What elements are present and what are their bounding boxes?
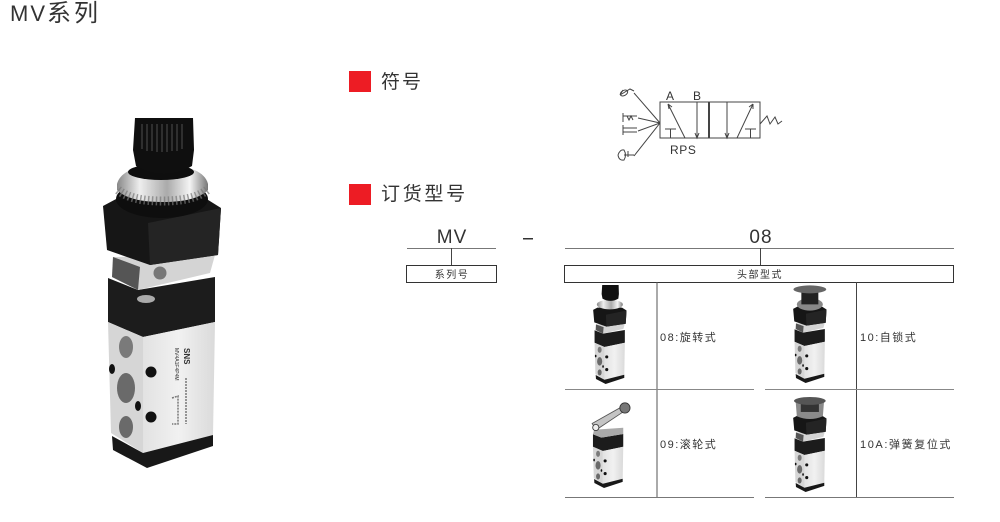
code segment: series: 系列号 [435,268,469,281]
metal bracket and collar [103,198,221,290]
option 08 rotary: 08:旋转式 [660,330,717,344]
valve body [108,277,215,468]
thumbnail 10 [793,285,827,383]
actuator icons [620,89,634,95]
code segment: series [406,227,496,282]
heading: order code [349,183,468,205]
code dash [523,238,533,240]
thumbnail 10A [793,397,827,492]
option 10A spring return: 10A:弹簧复位式 [860,437,952,451]
port labels: RPS [670,143,696,157]
heading: order code: 订货型号 [381,183,468,205]
head type table [565,282,954,498]
body lettering: SNS [182,348,191,365]
heading: symbol: 符号 [381,71,423,93]
pneumatic symbol diagram [618,89,782,160]
head type label box [564,266,954,282]
code segment: series: MV [437,227,467,248]
series label box [406,266,496,282]
option 09 roller: 09:滚轮式 [660,437,717,451]
red square marker [349,71,371,92]
title: MV系列 [10,0,101,27]
body lettering [173,348,191,381]
chrome ring [117,165,208,202]
spring [760,116,782,124]
bracket screw [154,266,166,280]
option 08 rotary [593,285,717,384]
valve box [660,102,760,138]
body screw [137,295,155,303]
body markings [172,378,186,424]
body lettering: MV4A1F4P4M [173,348,179,381]
option 10 self-locking [793,285,917,383]
red square marker [349,184,371,205]
main product photo: MV valve [103,118,221,468]
port labels [666,89,701,157]
black ring base [116,180,208,218]
option 10A spring return [793,397,952,492]
thumbnail 08 [593,285,627,384]
thumbnail 09 [592,403,630,488]
rotary knob [133,118,194,174]
actuator lead lines [634,93,660,156]
option 10 self-locking: 10:自锁式 [860,330,917,344]
port labels: B [693,89,701,103]
code segment: head type [564,227,954,282]
code segment: head type: 08 [749,227,773,248]
code segment: head type: 头部型式 [737,268,783,281]
heading: symbol [349,71,423,93]
port labels: A [666,89,674,103]
option 09 roller [592,403,717,488]
flow arrows [668,104,685,138]
